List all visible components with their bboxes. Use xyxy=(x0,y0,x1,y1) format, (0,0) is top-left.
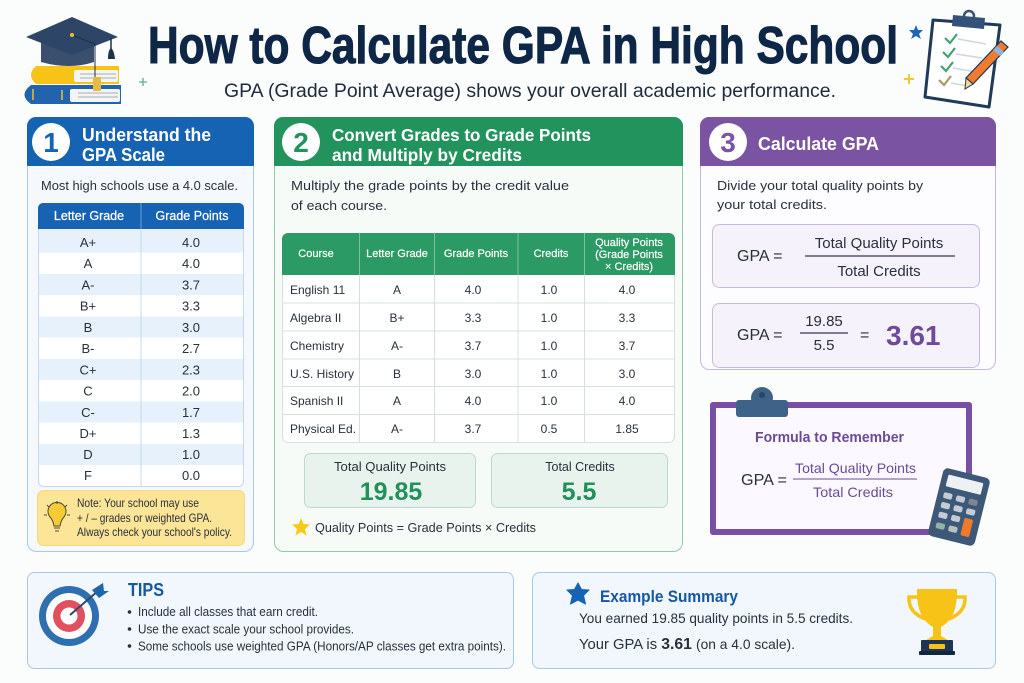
intro text: your total credits. xyxy=(717,197,827,212)
table: course calculation: Quality Points xyxy=(595,237,663,249)
panel: step 2 convert grades xyxy=(274,117,683,552)
panel: step 1 GPA scale xyxy=(27,117,254,552)
table: grade scale: 3.0 xyxy=(182,320,200,335)
intro text xyxy=(717,178,924,212)
table: course calculation xyxy=(282,233,675,442)
intro text xyxy=(291,178,569,213)
step number 3: 3 xyxy=(720,127,736,158)
table: course calculation: Physical Ed. xyxy=(290,422,356,436)
tips list xyxy=(128,604,506,654)
table: course calculation: Chemistry xyxy=(290,339,344,353)
table: course calculation: × Credits) xyxy=(605,261,653,273)
heading: Convert Grades to Grade Points xyxy=(332,125,591,145)
intro text: Multiply the grade points by the credit value xyxy=(291,178,569,193)
table: course calculation: 3.3 xyxy=(465,311,482,325)
table: grade scale: 2.7 xyxy=(182,341,200,356)
table: course calculation: A- xyxy=(391,339,403,353)
table: grade scale: 0.0 xyxy=(182,468,200,483)
intro text: of each course. xyxy=(291,198,387,213)
table: course calculation: Grade Points xyxy=(444,248,509,260)
table: course calculation: 4.0 xyxy=(465,283,482,297)
icon: yellow sparkle xyxy=(904,74,914,84)
formula box: Total Credits xyxy=(837,263,921,280)
note callout: Always check your school's policy. xyxy=(77,525,232,539)
table: course calculation: 1.85 xyxy=(615,422,639,436)
table: grade scale: B xyxy=(84,320,92,335)
table: grade scale: Letter Grade xyxy=(54,209,124,223)
table: course calculation: Letter Grade xyxy=(366,248,428,260)
total quality points: Total Quality Points xyxy=(334,460,446,474)
table: course calculation: English 11 xyxy=(290,283,345,297)
table: course calculation: 4.0 xyxy=(619,394,636,408)
table: grade scale: A+ xyxy=(80,235,96,250)
table: grade scale: 4.0 xyxy=(182,235,200,250)
table: course calculation: 3.7 xyxy=(465,422,482,436)
table: grade scale: Grade Points xyxy=(156,209,228,223)
total credits: Total Credits xyxy=(545,460,615,474)
table: course calculation: Credits xyxy=(534,248,569,260)
table: grade scale: C- xyxy=(81,405,95,420)
total quality points: 19.85 xyxy=(360,478,422,506)
table: course calculation: 3.3 xyxy=(619,311,636,325)
icon: graduation cap on books xyxy=(24,17,121,104)
icon: trophy xyxy=(909,589,965,655)
panel: example summary xyxy=(532,572,996,668)
table: course calculation: 3.0 xyxy=(465,367,482,381)
step number 3 xyxy=(709,123,747,161)
heading: TIPS xyxy=(128,580,164,600)
table: course calculation: 1.0 xyxy=(541,394,558,408)
formula: GPA = xyxy=(741,472,787,489)
formula box xyxy=(712,224,980,288)
intro text: Most high schools use a 4.0 scale. xyxy=(41,178,238,193)
table: grade scale: D+ xyxy=(80,426,96,441)
table: course calculation: 4.0 xyxy=(465,394,482,408)
table: course calculation: 3.7 xyxy=(465,339,482,353)
worked calculation box: = xyxy=(860,327,869,344)
table: grade scale: 3.3 xyxy=(182,298,200,314)
table: course calculation: Spanish II xyxy=(290,394,343,408)
worked calculation box xyxy=(712,304,980,368)
heading: Formula to Remember xyxy=(755,430,904,446)
formula: Total Quality Points xyxy=(795,460,916,476)
table: grade scale: F xyxy=(84,468,92,483)
worked calculation box: 5.5 xyxy=(814,337,834,354)
step number 1 xyxy=(32,123,70,161)
total quality points xyxy=(304,454,476,508)
table: course calculation: 4.0 xyxy=(619,283,636,297)
tips list: Some schools use weighted GPA (Honors/AP classes get extra points). xyxy=(138,638,506,654)
formula box: GPA = xyxy=(737,248,783,265)
table: course calculation: (Grade Points xyxy=(595,249,663,261)
icon: target with dart xyxy=(39,583,109,646)
table: grade scale: D xyxy=(83,447,93,462)
table: course calculation: A xyxy=(393,394,401,408)
subtitle: GPA (Grade Point Average) shows your overall academic performance. xyxy=(224,81,836,102)
intro text: Divide your total quality points by xyxy=(717,178,924,193)
table: grade scale xyxy=(38,203,244,486)
worked calculation box: 19.85 xyxy=(805,313,843,330)
table: grade scale: A- xyxy=(82,278,94,292)
table: grade scale: 1.7 xyxy=(182,405,200,420)
table: grade scale: B+ xyxy=(80,298,96,314)
summary text xyxy=(579,610,853,653)
table: grade scale: 1.0 xyxy=(182,447,200,462)
icon: light bulb xyxy=(44,501,70,531)
heading xyxy=(82,125,211,165)
table: grade scale: B- xyxy=(82,341,94,356)
total credits: 5.5 xyxy=(562,478,596,506)
tips list: Include all classes that earn credit. xyxy=(138,604,318,619)
panel: tips xyxy=(28,572,514,668)
table: course calculation: 1.0 xyxy=(541,311,558,325)
table: course calculation: 0.5 xyxy=(541,422,558,436)
note callout xyxy=(38,490,244,546)
formula: Total Credits xyxy=(813,484,893,500)
worked calculation box: 3.61 xyxy=(886,320,940,351)
table: course calculation: 1.0 xyxy=(541,367,558,381)
heading xyxy=(332,125,591,165)
table: grade scale: 2.3 xyxy=(182,362,200,378)
panel header xyxy=(27,117,254,166)
formula xyxy=(741,460,917,500)
table: course calculation: B+ xyxy=(389,311,405,325)
table: grade scale: 4.0 xyxy=(182,256,200,271)
summary text: Your GPA is 3.61 (on a 4.0 scale). xyxy=(579,636,795,653)
icon: green sparkle xyxy=(139,78,147,86)
table: course calculation: 3.7 xyxy=(619,339,636,353)
table: course calculation: 3.0 xyxy=(619,367,636,381)
icon: board clip xyxy=(736,387,788,417)
note callout: + / – grades or weighted GPA. xyxy=(77,511,212,525)
quality points formula: Quality Points = Grade Points × Credits xyxy=(315,521,536,535)
table: course calculation: A xyxy=(393,283,401,297)
icon: clipboard with pencil xyxy=(925,11,1008,107)
table: course calculation: U.S. History xyxy=(290,367,354,381)
table: grade scale: 1.3 xyxy=(182,426,200,441)
panel header xyxy=(274,117,683,166)
formula box: Total Quality Points xyxy=(815,235,943,252)
icon: blue star xyxy=(909,25,923,39)
table: course calculation: Algebra II xyxy=(290,311,341,325)
note callout: Note: Your school may use xyxy=(77,496,199,510)
heading: and Multiply by Credits xyxy=(332,145,522,165)
panel: formula to remember xyxy=(713,387,991,547)
table: course calculation: 1.0 xyxy=(541,339,558,353)
panel: step 3 calculate GPA xyxy=(700,117,996,370)
icon: calculator xyxy=(927,467,991,547)
step number 2: 2 xyxy=(293,127,309,158)
worked calculation box: GPA = xyxy=(737,327,783,344)
panel header xyxy=(700,117,996,166)
table: course calculation: A- xyxy=(391,422,403,436)
table: grade scale: C+ xyxy=(80,362,96,378)
table: grade scale: 3.7 xyxy=(182,278,200,292)
heading: Calculate GPA xyxy=(758,134,879,154)
total credits xyxy=(492,454,668,508)
table: course calculation: B xyxy=(393,367,401,381)
heading: GPA Scale xyxy=(82,145,165,165)
tips list: Use the exact scale your school provides. xyxy=(138,622,354,636)
table: grade scale: A xyxy=(84,256,93,271)
table: course calculation: 1.0 xyxy=(541,283,558,297)
heading: Example Summary xyxy=(600,588,739,606)
icon: star xyxy=(567,583,589,604)
step number 2 xyxy=(282,123,320,161)
step number 1: 1 xyxy=(43,127,59,158)
table: grade scale: C xyxy=(83,384,93,398)
table: grade scale: 2.0 xyxy=(182,384,200,398)
summary text: You earned 19.85 quality points in 5.5 credits. xyxy=(579,610,853,626)
table: course calculation: Course xyxy=(298,248,334,260)
heading: Understand the xyxy=(82,125,211,145)
